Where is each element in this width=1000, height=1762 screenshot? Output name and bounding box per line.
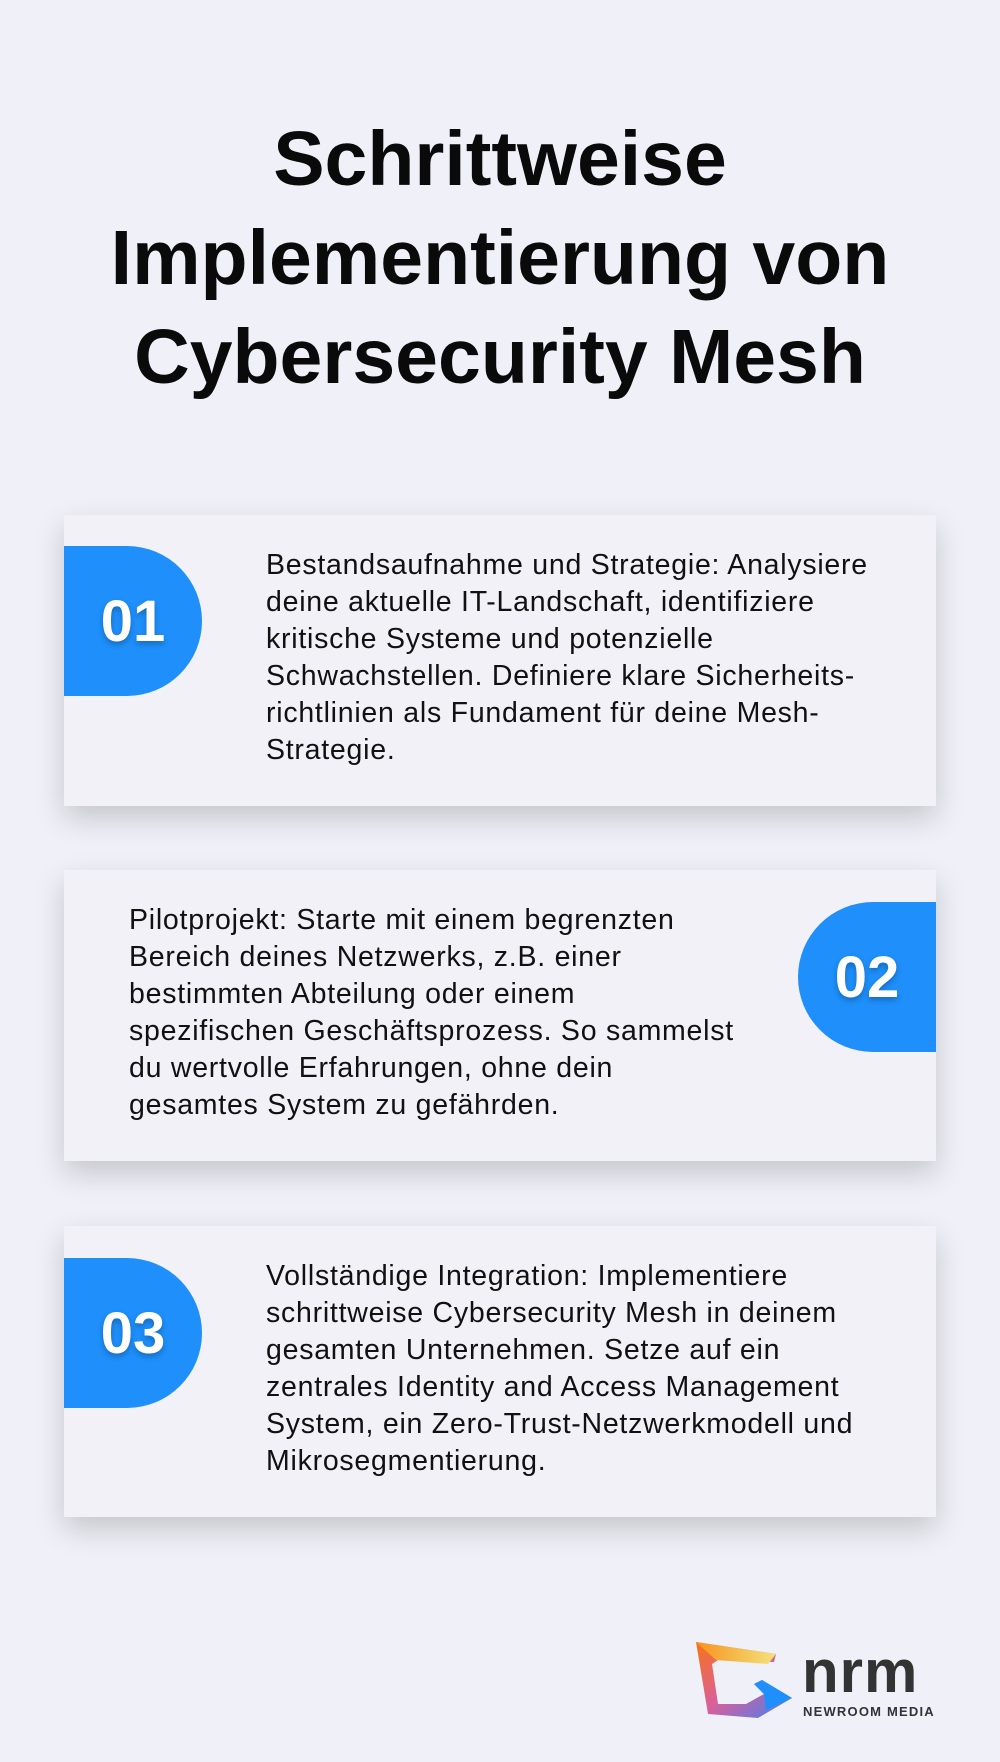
text step 02: Bereich deines Netzwerks, z.B. einer xyxy=(129,941,622,973)
text step 01: Strategie. xyxy=(266,734,396,766)
text step 03: schrittweise Cybersecurity Mesh in deinem xyxy=(266,1297,837,1329)
badge 01: 01 xyxy=(101,588,165,654)
text step 03: Mikrosegmentierung. xyxy=(266,1445,546,1477)
badge 02: 02 xyxy=(835,944,899,1010)
text step 03: Vollständige Integration: Implementiere xyxy=(266,1260,788,1292)
text step 01: Bestandsaufnahme und Strategie: Analysiere xyxy=(266,549,868,581)
panel: step 01 xyxy=(64,515,936,806)
logo wordmark: nrm xyxy=(802,1638,918,1705)
text step 02: gesamtes System zu gefährden. xyxy=(129,1089,559,1121)
text step 02: Pilotprojekt: Starte mit einem begrenzten xyxy=(129,904,675,936)
text step 01: richtlinien als Fundament für deine Mesh- xyxy=(266,697,820,729)
text step 03: zentrales Identity and Access Management xyxy=(266,1371,839,1403)
panel: step 02 xyxy=(64,870,936,1161)
title: Schrittweise xyxy=(273,116,727,202)
text step 01: kritische Systeme und potenzielle xyxy=(266,623,714,655)
logo subtitle: NEWROOM MEDIA xyxy=(803,1704,935,1719)
icon: nrm logo mark xyxy=(696,1642,792,1718)
text step 03 xyxy=(266,1260,853,1477)
text step 03: gesamten Unternehmen. Setze auf ein xyxy=(266,1334,780,1366)
text step 02 xyxy=(129,904,734,1121)
text step 03: System, ein Zero-Trust-Netzwerkmodell und xyxy=(266,1408,853,1440)
badge 03 xyxy=(64,1258,202,1408)
text step 01: deine aktuelle IT-Landschaft, identifiziere xyxy=(266,586,815,618)
text step 01: Schwachstellen. Definiere klare Sicherheits- xyxy=(266,660,855,692)
badge 02 xyxy=(798,902,936,1052)
title: Implementierung von xyxy=(111,215,889,301)
title: Cybersecurity Mesh xyxy=(134,314,866,400)
logo xyxy=(696,1638,935,1719)
badge 03: 03 xyxy=(101,1300,165,1366)
text step 01 xyxy=(266,549,868,766)
badge 01 xyxy=(64,546,202,696)
title xyxy=(111,116,889,400)
text step 02: du wertvolle Erfahrungen, ohne dein xyxy=(129,1052,613,1084)
panel: step 03 xyxy=(64,1226,936,1517)
text step 02: bestimmten Abteilung oder einem xyxy=(129,978,575,1010)
text step 02: spezifischen Geschäftsprozess. So sammelst xyxy=(129,1015,734,1047)
